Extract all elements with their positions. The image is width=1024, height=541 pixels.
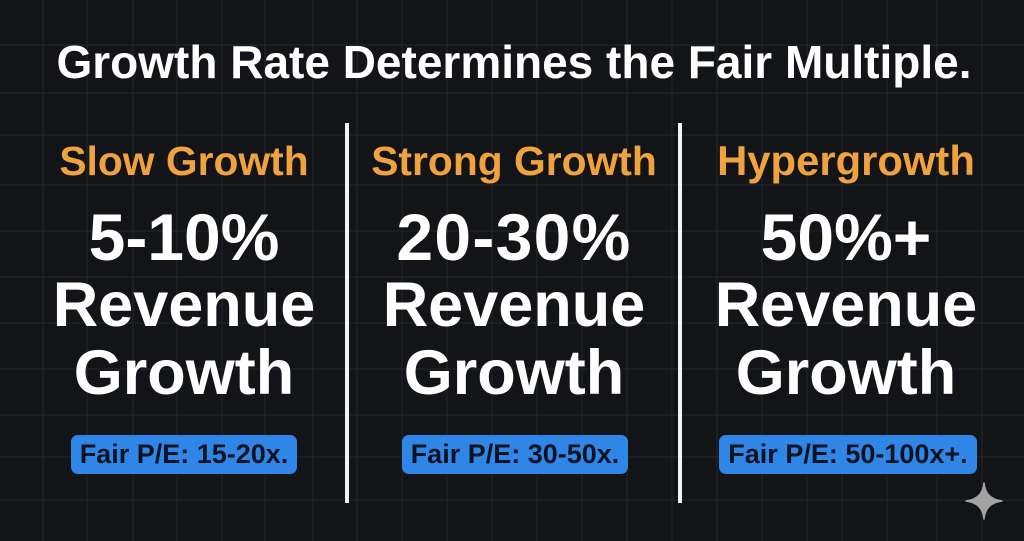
label: revenue growth: Revenue [383,270,645,340]
growth rate: 5-10%: 5-10% [89,200,279,274]
title: Growth Rate Determines the Fair Multiple. [56,36,972,88]
label: revenue growth: Growth [404,338,624,408]
panel: strong growth [371,138,657,474]
panel: hypergrowth [715,137,977,474]
label: revenue growth: Revenue [715,270,977,340]
growth rate: 20-30%: 20-30% [396,200,632,274]
badge: fair P/E: Fair P/E: 30-50x. [411,439,619,469]
divider: right [678,123,682,503]
growth rate: 50%+: 50%+ [761,200,931,274]
divider: left [345,123,349,503]
heading: strong growth: Strong Growth [371,138,657,184]
label: revenue growth [715,270,977,408]
badge: fair P/E: Fair P/E: 50-100x+. [728,439,968,469]
icon: sparkle [965,482,1003,520]
label: revenue growth: Growth [736,338,956,408]
badge: fair P/E: Fair P/E: 15-20x. [80,439,288,469]
label: revenue growth [383,270,645,408]
heading: hypergrowth: Hypergrowth [717,137,975,184]
label: revenue growth [53,270,315,408]
label: revenue growth: Growth [74,338,294,408]
label: revenue growth: Revenue [53,270,315,340]
heading: slow growth: Slow Growth [59,138,309,184]
panel: slow growth [53,138,315,474]
